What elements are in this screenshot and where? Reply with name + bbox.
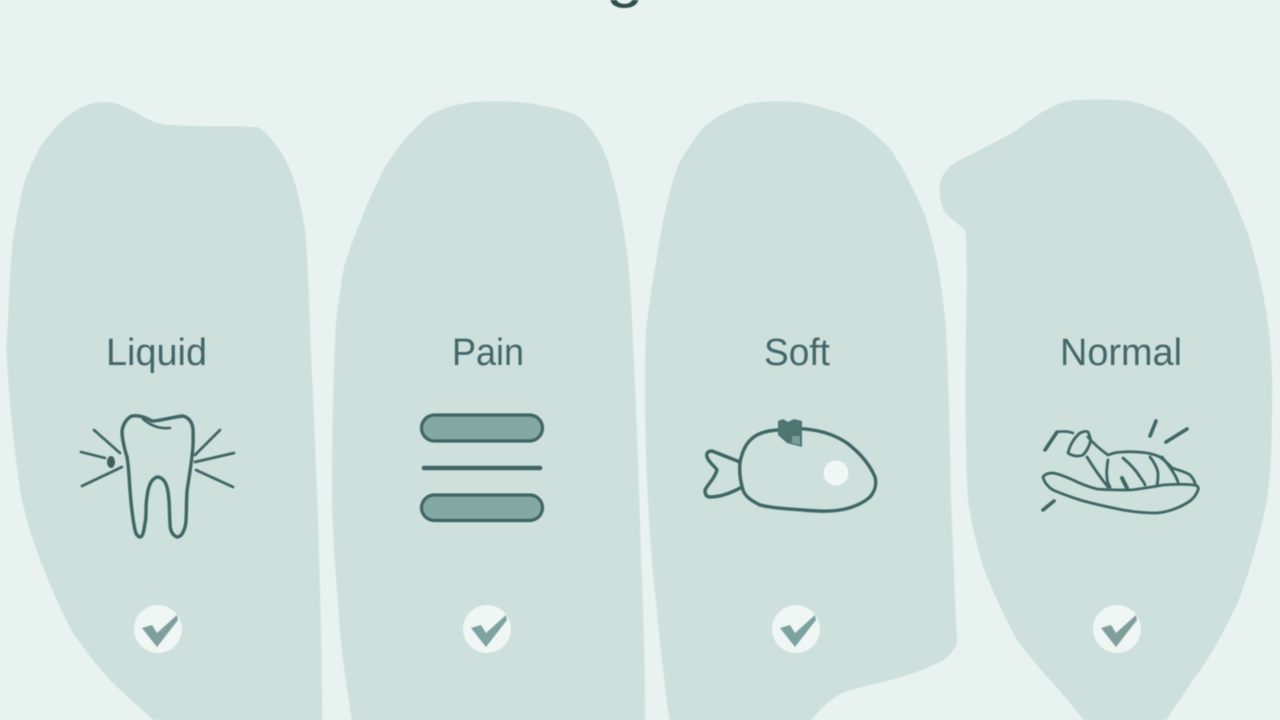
icon: fish top tuft [778,419,802,447]
check mark: liquid [134,605,182,653]
panel background: pain [332,101,645,720]
check mark: soft [772,605,820,653]
label: Liquid: Liquid [106,332,207,374]
panel: liquid [7,102,322,720]
check mark: pain [463,605,511,653]
panel background: normal [940,100,1272,720]
label: Normal: Normal [1060,332,1182,374]
panel background: soft [645,101,957,720]
panel: pain [332,101,645,720]
icon: motion marks [1043,421,1187,510]
icon: tooth decay spot [107,456,115,468]
icon: fish [705,428,876,511]
panel: soft [645,101,957,720]
check mark: normal [1093,605,1141,653]
label: Pain: Pain [452,332,524,374]
label: Soft: Soft [764,332,830,374]
icon: fish eye [824,460,848,486]
icon: food on plate [1043,431,1198,513]
panel: normal [940,100,1272,720]
icon: tooth [81,416,234,537]
icon: stacked bars [422,415,542,520]
panel background: liquid [7,102,322,720]
